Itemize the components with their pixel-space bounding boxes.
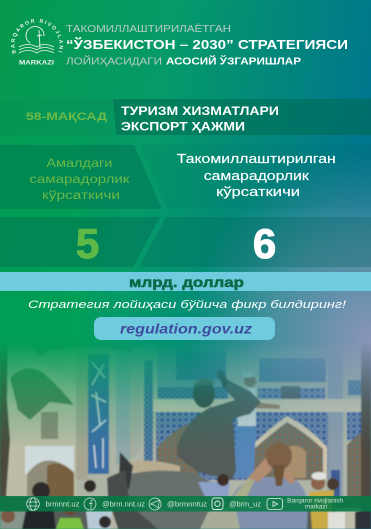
unit band: млрд. доллар [129, 274, 244, 290]
man with white cap [311, 476, 325, 490]
upper right tiles [259, 358, 326, 382]
header line 2: “ЎЗБЕКИСТОН – 2030” СТРАТЕГИЯСИ [66, 37, 348, 52]
logo wordmark: MARKAZI [19, 60, 54, 66]
donkey ears and head [119, 452, 133, 490]
left crowd figures [32, 482, 50, 500]
goal number: 58-МАҚСАД [26, 111, 107, 123]
pale ground [109, 512, 119, 529]
logo globe and figure [26, 27, 44, 48]
goal band right [113, 99, 371, 135]
icon: instagram [212, 498, 223, 510]
dark window [281, 386, 300, 399]
statue: Nasreddin body [177, 406, 236, 480]
header line 3: АСОСИЙ ЎЗГАРИШЛАР [166, 54, 301, 68]
footer social strip [0, 496, 371, 512]
call to action: Стратегия лойиҳаси бўйича фикр билдиринг! [28, 299, 346, 311]
footer organisation name: markazi [305, 504, 327, 510]
header line 1: ТАКОМИЛЛАШТИРИЛАЁТГАН [66, 23, 231, 35]
woman: shirt [231, 477, 308, 529]
goal title: ТУРИЗМ ХИЗМАТЛАРИ [121, 106, 279, 118]
goal band left [0, 99, 113, 135]
tile pier right [328, 352, 343, 500]
photo background wall [6, 346, 362, 498]
header line 3: ЛОЙИҲАСИДАГИ [66, 54, 162, 68]
unit band [0, 272, 371, 291]
facebook handle: @brm.nnt.uz [102, 502, 146, 508]
brick pier [76, 377, 88, 480]
flowers on donkey [130, 461, 180, 474]
blue calligraphy panel [88, 354, 109, 474]
link button [94, 317, 275, 340]
panel: current value: 5 [76, 220, 99, 267]
panel: improved value: 6 [253, 220, 276, 267]
backpack [200, 505, 240, 529]
footer organisation name: Barqaror rivojlanish [287, 498, 344, 504]
cream cornice [153, 399, 363, 412]
photo: Nasreddin statue at Lyabi-Hauz [0, 330, 371, 529]
goal band [0, 99, 371, 135]
man with blue shirt [198, 482, 230, 497]
telegram handle: @brmnntuz [167, 502, 208, 508]
panel: current value [0, 217, 160, 267]
left doorway arch [27, 460, 74, 497]
spandrel tiles [156, 412, 328, 480]
left window panel [25, 446, 74, 474]
goal title [121, 106, 279, 134]
panel: improved value [139, 217, 371, 267]
cloudy sky tint [0, 150, 371, 529]
left tree foliage [10, 368, 74, 420]
goal title: ЭКСПОРТ ҲАЖМИ [121, 122, 245, 134]
man on statue: head and cap [244, 375, 256, 387]
link button: regulation.gov.uz [120, 322, 252, 336]
inner arch [284, 445, 306, 478]
right crowd figures [327, 478, 339, 490]
logo book [19, 44, 54, 53]
far right tiles [348, 380, 363, 395]
panel: improved indicator label: Такомиллаштирилган [177, 152, 336, 166]
upper niche with tiles [156, 355, 224, 398]
left lattice window [41, 412, 58, 439]
narrow tile column [144, 360, 153, 480]
woman: hair [266, 442, 292, 470]
left cream building wall [6, 387, 76, 496]
website handle: brmnnt.uz [46, 502, 80, 508]
woman: backpack strap [233, 478, 255, 496]
panel: current indicator label: Амалдаги [46, 158, 112, 170]
panel: current indicator label [0, 145, 162, 209]
logo [10, 19, 64, 66]
man on statue: shirt and arm [236, 388, 256, 426]
right tree trunk [361, 330, 371, 510]
woman: raised arms [248, 455, 272, 482]
statue: head [193, 380, 215, 408]
header [10, 19, 348, 68]
donkey body [126, 470, 210, 529]
left green glow [0, 140, 90, 420]
panel: current indicator label: кўрсаткичи [42, 190, 120, 202]
icon: youtube [267, 498, 282, 510]
central arch [250, 416, 327, 480]
panel: improved indicator label: самарадорлик [204, 169, 309, 183]
crowd base [0, 497, 371, 529]
striped column [116, 352, 130, 465]
statue: raised arm [212, 380, 261, 420]
panel: improved indicator label [140, 145, 371, 209]
lower far-right arch [347, 432, 363, 500]
left arch under cornice [157, 424, 200, 480]
icon: facebook [84, 498, 96, 510]
man on statue: jeans [234, 425, 256, 478]
header line 3 [66, 54, 301, 68]
instagram handle: @brm_uz [229, 502, 262, 508]
calligraphy strokes [91, 362, 106, 468]
icon: globe [27, 498, 39, 510]
left tree trunk [0, 330, 10, 497]
panel: improved indicator label: кўрсаткичи [216, 185, 300, 199]
panel: current indicator label: самарадорлик [29, 174, 131, 186]
top foliage [25, 340, 145, 356]
icon: telegram [149, 498, 161, 510]
statue: raised hand [216, 370, 229, 389]
